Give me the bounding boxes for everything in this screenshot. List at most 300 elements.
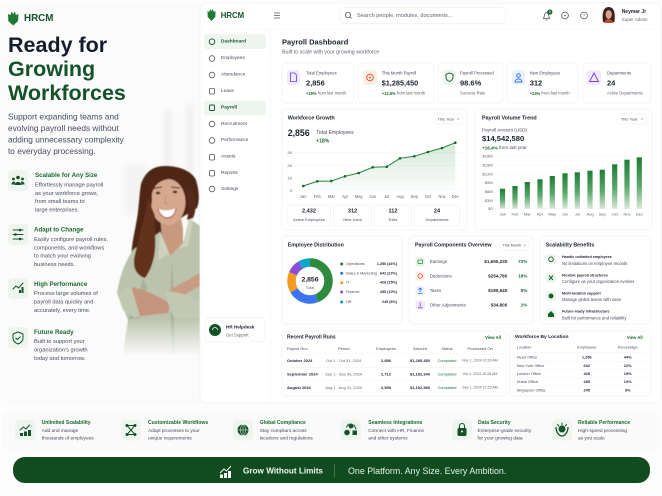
panel: payroll volume trend: Payroll Volume Trend xyxy=(482,116,537,122)
page heading xyxy=(282,38,379,55)
strip: global compliance: Global Compliance xyxy=(260,420,306,426)
KPI: this month payroll: This Month Payroll xyxy=(382,70,416,76)
sidebar: Payroll xyxy=(221,104,237,110)
feature: performance: accurately, every time. xyxy=(34,308,91,314)
line chart: Nov xyxy=(438,194,447,199)
row: august: Aug 1 - Aug 31, 2024 xyxy=(325,385,363,390)
helpdesk card: Get Support xyxy=(226,332,249,338)
table header: Processed On xyxy=(467,346,493,351)
sidebar: Recruitment xyxy=(221,121,248,127)
feature: adapt: to match your evolving xyxy=(34,254,91,260)
donut legend xyxy=(340,262,398,304)
panel: payroll components overview: Payroll Components Overview xyxy=(415,243,492,249)
line chart: Oct xyxy=(425,194,432,199)
KPI: new employees: New Employees xyxy=(530,70,560,76)
row: earnings xyxy=(416,257,527,266)
bar chart: $0 xyxy=(488,206,493,211)
strip: reliable performance: High-speed processing xyxy=(578,428,627,434)
menu: leave xyxy=(210,88,214,94)
KPI: total employees: 2,856 xyxy=(306,78,325,88)
table header: Amount xyxy=(413,346,428,351)
strip: global compliance: Stay compliant across xyxy=(260,428,307,434)
bar chart: $9M xyxy=(485,180,493,185)
growth summary: +18% xyxy=(316,138,330,144)
stat: active employees: Active Employees xyxy=(293,217,325,222)
feature: future ready: Future Ready xyxy=(34,329,74,336)
bar chart: Nov xyxy=(623,212,631,217)
banner heading: Grow Without Limits xyxy=(243,466,323,476)
banner tagline: One Platform. Any Size. Every Ambition. xyxy=(348,466,506,476)
donut legend: Operations xyxy=(346,262,365,266)
top bar: Super Admin xyxy=(622,17,648,22)
feature: adapt: business needs. xyxy=(34,262,76,268)
benefit: unlimited employees: Handle unlimited employees xyxy=(562,255,612,259)
feature: scalable: large enterprises. xyxy=(35,207,79,213)
strip: reliable performance: as you scale xyxy=(578,436,605,442)
feature: adapt xyxy=(8,224,108,268)
call-to-action banner xyxy=(13,457,650,483)
location table: New York Office xyxy=(517,363,544,368)
bar chart: Sep xyxy=(599,212,607,217)
line chart: Aug xyxy=(396,194,404,199)
sidebar: Leave xyxy=(221,88,234,94)
table header: Status xyxy=(441,346,453,351)
location table: Head Office xyxy=(517,354,537,360)
donut legend: 428 (15%) xyxy=(380,281,398,285)
bar chart: Jul xyxy=(575,212,580,217)
row: august: Sep 1, 2024 10:25 AM xyxy=(462,385,498,389)
panel: employee distribution: Employee Distribution xyxy=(288,243,344,249)
location table xyxy=(516,344,645,392)
benefit: infrastructure xyxy=(546,309,627,320)
feature: future ready xyxy=(8,327,88,362)
bar chart: Feb xyxy=(512,212,519,217)
location table: 245 xyxy=(583,388,591,392)
strip: data security: Enterprise-grade security xyxy=(478,428,532,434)
hero title xyxy=(8,33,126,105)
collar xyxy=(158,219,193,260)
active menu: dashboard xyxy=(204,34,266,49)
row: september: Completed xyxy=(438,372,456,376)
row: deductions xyxy=(416,271,527,281)
location table: Employees xyxy=(577,344,596,350)
benefit: unlimited employees xyxy=(546,254,627,266)
hair front xyxy=(141,169,186,231)
neck and chest xyxy=(160,214,183,257)
line chart: Dec xyxy=(452,194,459,199)
feature: future ready: organization's growth xyxy=(34,348,88,354)
bar chart: $12M xyxy=(483,172,493,176)
row: september: Oct 1, 2024 10:28 AM xyxy=(463,372,497,376)
line chart: Feb xyxy=(314,194,322,199)
stat: exits xyxy=(374,205,412,226)
panel: workforce by location: Workforce By Location xyxy=(515,334,568,340)
bar chart: Apr xyxy=(537,212,544,217)
KPI: payroll processed: Payroll Processed xyxy=(460,70,494,76)
strip: global compliance: locations and regulations xyxy=(260,436,313,442)
stat: departments xyxy=(414,205,460,226)
hero description: adding unnecessary complexity xyxy=(8,134,125,144)
helpdesk card xyxy=(205,318,265,342)
strip: global compliance xyxy=(233,420,313,442)
panel: payroll components overview xyxy=(409,236,533,324)
feature: scalable: from small teams to xyxy=(35,199,85,205)
KPI: departments: 24 xyxy=(607,78,616,88)
KPI: total employees: +18% from last month xyxy=(306,90,347,96)
line chart: Apr xyxy=(342,194,349,199)
donut legend: Sales & Marketing xyxy=(346,271,377,275)
row: earnings: $1,650,230 xyxy=(484,259,508,264)
row: taxes xyxy=(416,286,527,296)
feature: performance: High Performance xyxy=(34,281,88,288)
donut legend: 245 (9%) xyxy=(382,300,398,304)
row: deductions: $254,780 xyxy=(488,274,508,278)
strip: customizable workflows: Customizable Workflows xyxy=(148,420,208,426)
stat: new joins: 312 xyxy=(348,209,357,215)
panel: recent payroll runs xyxy=(282,331,507,396)
strip: customizable workflows: Adapt processes to your xyxy=(148,428,200,434)
user name: Neymar Jr xyxy=(622,9,646,15)
location table: 428 xyxy=(583,371,591,376)
top bar: Search people, modules, documents... xyxy=(357,13,453,19)
shirt shading xyxy=(128,278,147,320)
menu: employees xyxy=(209,56,215,61)
hair back xyxy=(131,166,199,278)
benefit: infrastructure: Future-ready infrastructure xyxy=(562,309,610,313)
strip: customizable workflows: unique requirements xyxy=(148,436,192,442)
panel: workforce growth xyxy=(282,109,467,230)
line chart: Mar xyxy=(328,194,335,199)
line chart: Jul xyxy=(384,194,389,199)
row: deductions: 18% xyxy=(518,274,527,278)
page heading: Built to scale with your growing workforce xyxy=(282,49,379,55)
payroll summary xyxy=(482,128,527,150)
icon: help xyxy=(581,12,587,19)
top bar: 5 xyxy=(549,10,551,14)
table header: Payroll Run xyxy=(287,346,308,351)
row: august xyxy=(287,385,498,390)
feature: future ready: today and tomorrow. xyxy=(34,356,86,362)
KPI: new employees xyxy=(507,63,578,103)
menu: attendance xyxy=(209,72,215,78)
benefit: infrastructure: Built for performance and reliability xyxy=(562,316,627,320)
row: october: 2,856 xyxy=(381,358,392,363)
hero description: Support expanding teams and xyxy=(8,112,119,122)
facial features xyxy=(153,187,180,188)
strip: data security xyxy=(452,420,532,442)
sidebar xyxy=(204,29,270,403)
row: august: $1,102,580 xyxy=(410,385,431,390)
panel: recent payroll runs: Recent Payroll Runs xyxy=(287,334,336,340)
search box xyxy=(340,8,506,24)
feature: scalable: Scalable for Any Size xyxy=(35,172,98,179)
benefit: flexible structures: Configure as your organization evolves xyxy=(562,279,634,284)
row: taxes: Taxes xyxy=(430,288,442,293)
panel: workforce by location xyxy=(510,331,651,396)
strip: reliable performance xyxy=(552,420,630,442)
benefit: flexible structures xyxy=(546,273,634,284)
line chart: 2K xyxy=(287,163,293,168)
bar chart: $15M xyxy=(483,162,493,168)
donut legend: IT xyxy=(346,281,350,285)
sidebar: Reports xyxy=(221,170,238,176)
feature: scalable xyxy=(8,170,103,213)
row: other adjustments: 2% xyxy=(521,302,527,308)
icon: notifications xyxy=(544,12,550,20)
stat: new joins xyxy=(334,205,371,226)
menu: performance xyxy=(209,138,215,143)
location table: Singapore Office xyxy=(517,388,546,392)
dropdown: this year xyxy=(618,114,647,124)
feature: performance xyxy=(8,278,98,314)
sidebar: Employees xyxy=(221,55,245,61)
location table: 10% xyxy=(624,379,632,384)
left hero panel xyxy=(1,3,201,403)
line chart: 0 xyxy=(290,188,293,193)
dropdown: this year xyxy=(434,114,463,124)
shirt body xyxy=(117,221,200,360)
photo: smiling woman with crossed arms xyxy=(100,166,201,403)
dropdown: this year: This Year xyxy=(438,117,455,122)
KPI: this month payroll: +12.6% from last month xyxy=(382,90,426,96)
bar chart: Oct xyxy=(612,212,619,217)
row: september: $1,182,340 xyxy=(410,372,431,376)
hero description: evolving payroll needs without xyxy=(8,123,119,133)
KPI: new employees: +24% from last month xyxy=(530,90,570,96)
KPI: this month payroll xyxy=(358,63,434,103)
dropdown: this month: This Month xyxy=(502,244,521,248)
strip: unlimited scalability: Unlimited Scalability xyxy=(42,420,91,426)
bar chart: $6M xyxy=(485,189,493,194)
row: october: Nov 1, 2024 10:30 AM xyxy=(462,359,498,363)
bar chart: Aug xyxy=(586,212,594,217)
menu: settings xyxy=(209,186,215,192)
benefit: multi-location: Multi-location support xyxy=(562,291,601,295)
sidebar: Attendance xyxy=(221,72,246,78)
feature: performance: Process large volumes of xyxy=(34,291,98,297)
stat: exits: Exits xyxy=(389,217,397,222)
benefit: multi-location: Manage global teams with ease xyxy=(562,297,622,302)
hero title: Workforces xyxy=(8,81,126,105)
line chart xyxy=(287,141,462,199)
donut chart: 2,856 xyxy=(301,276,319,284)
row: august: 2,598 xyxy=(381,385,392,390)
panel: employee distribution xyxy=(282,236,402,324)
location table: 15% xyxy=(624,371,632,376)
row: august: August 2024 xyxy=(287,385,312,390)
sidebar: Dashboard xyxy=(221,38,246,44)
location table: 9% xyxy=(625,388,631,392)
KPI: departments xyxy=(583,63,651,103)
strip: seamless integrations: Seamless Integrations xyxy=(368,420,423,426)
stat: new joins: New Joins xyxy=(343,217,362,222)
panel: scalability benefits: Scalability Benefits xyxy=(546,243,594,249)
row: other adjustments: Other Adjustments xyxy=(430,302,467,308)
page heading: Payroll Dashboard xyxy=(282,38,349,46)
feature: adapt: components, and workflows xyxy=(34,245,104,251)
dropdown: this year: This Year xyxy=(621,117,638,122)
payroll summary: Payroll Amount (USD) xyxy=(482,128,527,132)
location table: London Office xyxy=(517,371,541,376)
line chart: Sep xyxy=(411,194,419,199)
helpdesk card: HR Helpdesk xyxy=(226,324,255,330)
strip: seamless integrations: Connect with HR, Finance xyxy=(368,428,424,434)
bar chart: Dec xyxy=(636,212,643,217)
benefit: unlimited employees: No limitations on employee records xyxy=(562,261,627,266)
location table: 642 xyxy=(583,363,591,368)
strip: data security: for your growing data xyxy=(478,436,523,442)
location table: 285 xyxy=(583,379,591,384)
near forearm xyxy=(132,287,170,316)
panel: scalability benefits xyxy=(540,236,651,324)
bottom feature strip xyxy=(2,412,660,450)
brand logo xyxy=(8,12,53,26)
location table: 1,256 xyxy=(582,354,592,360)
donut legend: 1,256 (44%) xyxy=(377,262,398,266)
strip: unlimited scalability: thousands of employees xyxy=(42,436,94,442)
row: other adjustments xyxy=(416,300,527,310)
blurred office backdrop xyxy=(125,105,192,215)
line chart: Jan xyxy=(300,194,307,199)
face xyxy=(150,179,186,225)
row: september: Sep 1 - Sep 30, 2024 xyxy=(325,372,363,376)
feature: adapt: Adapt to Change xyxy=(34,226,84,234)
bar chart: Jun xyxy=(562,212,568,217)
icon: messages xyxy=(562,12,568,19)
menu: assets xyxy=(210,154,214,160)
row: taxes: $180,640 xyxy=(488,288,508,293)
KPI: payroll processed xyxy=(438,63,503,103)
location table: Location xyxy=(517,344,531,350)
far forearm xyxy=(166,273,200,303)
KPI: total employees xyxy=(282,63,354,103)
strip: reliable performance: Reliable Performance xyxy=(578,420,630,426)
sidebar: Performance xyxy=(221,137,249,143)
line chart: 1K xyxy=(287,176,293,180)
user avatar xyxy=(601,7,617,23)
donut legend: Finance xyxy=(346,290,360,294)
growth summary: 2,856 xyxy=(288,128,310,138)
bar chart xyxy=(483,154,645,217)
hero description xyxy=(8,112,125,156)
top bar: HRCM xyxy=(221,11,244,20)
brand logo: HRCM xyxy=(24,13,53,24)
menu: recruitment xyxy=(209,121,215,127)
donut legend: HR xyxy=(346,300,352,304)
row: october: $1,285,450 xyxy=(410,358,431,363)
line chart: May xyxy=(355,194,364,199)
hero description: to everyday processing. xyxy=(8,146,96,156)
donut legend: 642 (22%) xyxy=(380,271,398,275)
row: october: Completed xyxy=(438,358,456,363)
benefit: multi-location xyxy=(546,291,622,302)
bar chart: May xyxy=(549,212,556,217)
dashboard window xyxy=(200,3,661,403)
KPI: departments: Active Departments xyxy=(607,90,643,96)
panel: payroll volume trend xyxy=(475,109,652,230)
location table: 44% xyxy=(624,354,632,360)
stat: departments: Departments xyxy=(426,217,448,222)
icon: menu xyxy=(274,13,280,18)
benefit: flexible structures: Flexible payroll structures xyxy=(562,273,608,277)
row: taxes: 8% xyxy=(521,288,527,293)
growth summary: Total Employees xyxy=(316,130,354,136)
icon: growth chart xyxy=(220,466,231,478)
KPI: payroll processed: 98.6% xyxy=(460,78,482,88)
strip: unlimited scalability xyxy=(15,420,94,442)
row: october xyxy=(287,358,498,363)
growth summary xyxy=(288,128,354,144)
line chart: 3K xyxy=(287,150,293,155)
row: september xyxy=(287,372,497,376)
stat: active employees: 2,432 xyxy=(302,209,316,215)
KPI: total employees: Total Employees xyxy=(306,70,337,76)
table header: Period xyxy=(338,346,349,351)
location table: 22% xyxy=(624,363,632,368)
feature: performance: payroll data quickly and xyxy=(34,300,93,306)
top bar: ? xyxy=(583,13,586,18)
KPI: payroll processed: Success Rate xyxy=(460,90,486,96)
strip: seamless integrations xyxy=(341,420,424,442)
hero title: Growing xyxy=(8,57,95,81)
strip: seamless integrations: and other systems xyxy=(368,436,408,442)
strip: unlimited scalability: Add and manage xyxy=(42,428,79,434)
menu: reports xyxy=(210,170,214,176)
panel: workforce growth: Workforce Growth xyxy=(288,116,335,122)
bar chart: Mar xyxy=(524,212,531,217)
strip: data security: Data Security xyxy=(478,420,511,426)
row: september: September 2024 xyxy=(287,372,318,376)
active menu: payroll xyxy=(204,100,266,116)
rolled sleeve right xyxy=(166,291,200,318)
KPI: this month payroll: $1,285,450 xyxy=(382,78,418,88)
feature: scalable: as your workforce grows, xyxy=(35,191,99,197)
row: september: 2,712 xyxy=(381,372,392,376)
feature: adapt: Easily configure payroll rules, xyxy=(34,237,108,243)
strip: customizable workflows xyxy=(121,420,208,442)
sidebar: Assets xyxy=(221,154,236,160)
row: october: October 2024 xyxy=(287,358,313,363)
row: august: Completed xyxy=(438,385,456,390)
donut chart: Total xyxy=(306,285,314,290)
payroll summary: $14,542,580 xyxy=(482,134,524,143)
stat: exits: 112 xyxy=(388,209,398,215)
top bar xyxy=(205,7,661,29)
donut legend: 285 (10%) xyxy=(380,290,398,294)
location table: Dubai Office xyxy=(517,379,538,384)
photo bottom fade xyxy=(100,318,201,356)
location table: Percentage xyxy=(618,344,638,350)
dashboard logo xyxy=(208,9,215,21)
line chart: Jun xyxy=(369,194,377,199)
row: deductions: Deductions xyxy=(430,274,452,278)
row: other adjustments: $34,800 xyxy=(491,302,508,308)
feature: scalable: Effortlessly manage payroll xyxy=(35,182,103,188)
left sleeve cuff xyxy=(117,286,140,318)
stat: departments: 24 xyxy=(434,209,441,215)
bar chart: Jan xyxy=(499,212,506,217)
row: october: Oct 1 - Oct 31, 2024 xyxy=(326,358,362,363)
KPI: new employees: 312 xyxy=(530,78,542,88)
feature: future ready: Built to support your xyxy=(34,339,85,345)
panel: recent payroll runs: View All xyxy=(485,335,501,340)
KPI: departments: Departments xyxy=(607,70,631,76)
row: earnings: Earnings xyxy=(430,259,448,264)
bar chart: $18M xyxy=(483,154,493,158)
donut chart xyxy=(292,262,328,300)
table header: Employees xyxy=(376,346,396,351)
hero title: Ready for xyxy=(8,33,108,57)
